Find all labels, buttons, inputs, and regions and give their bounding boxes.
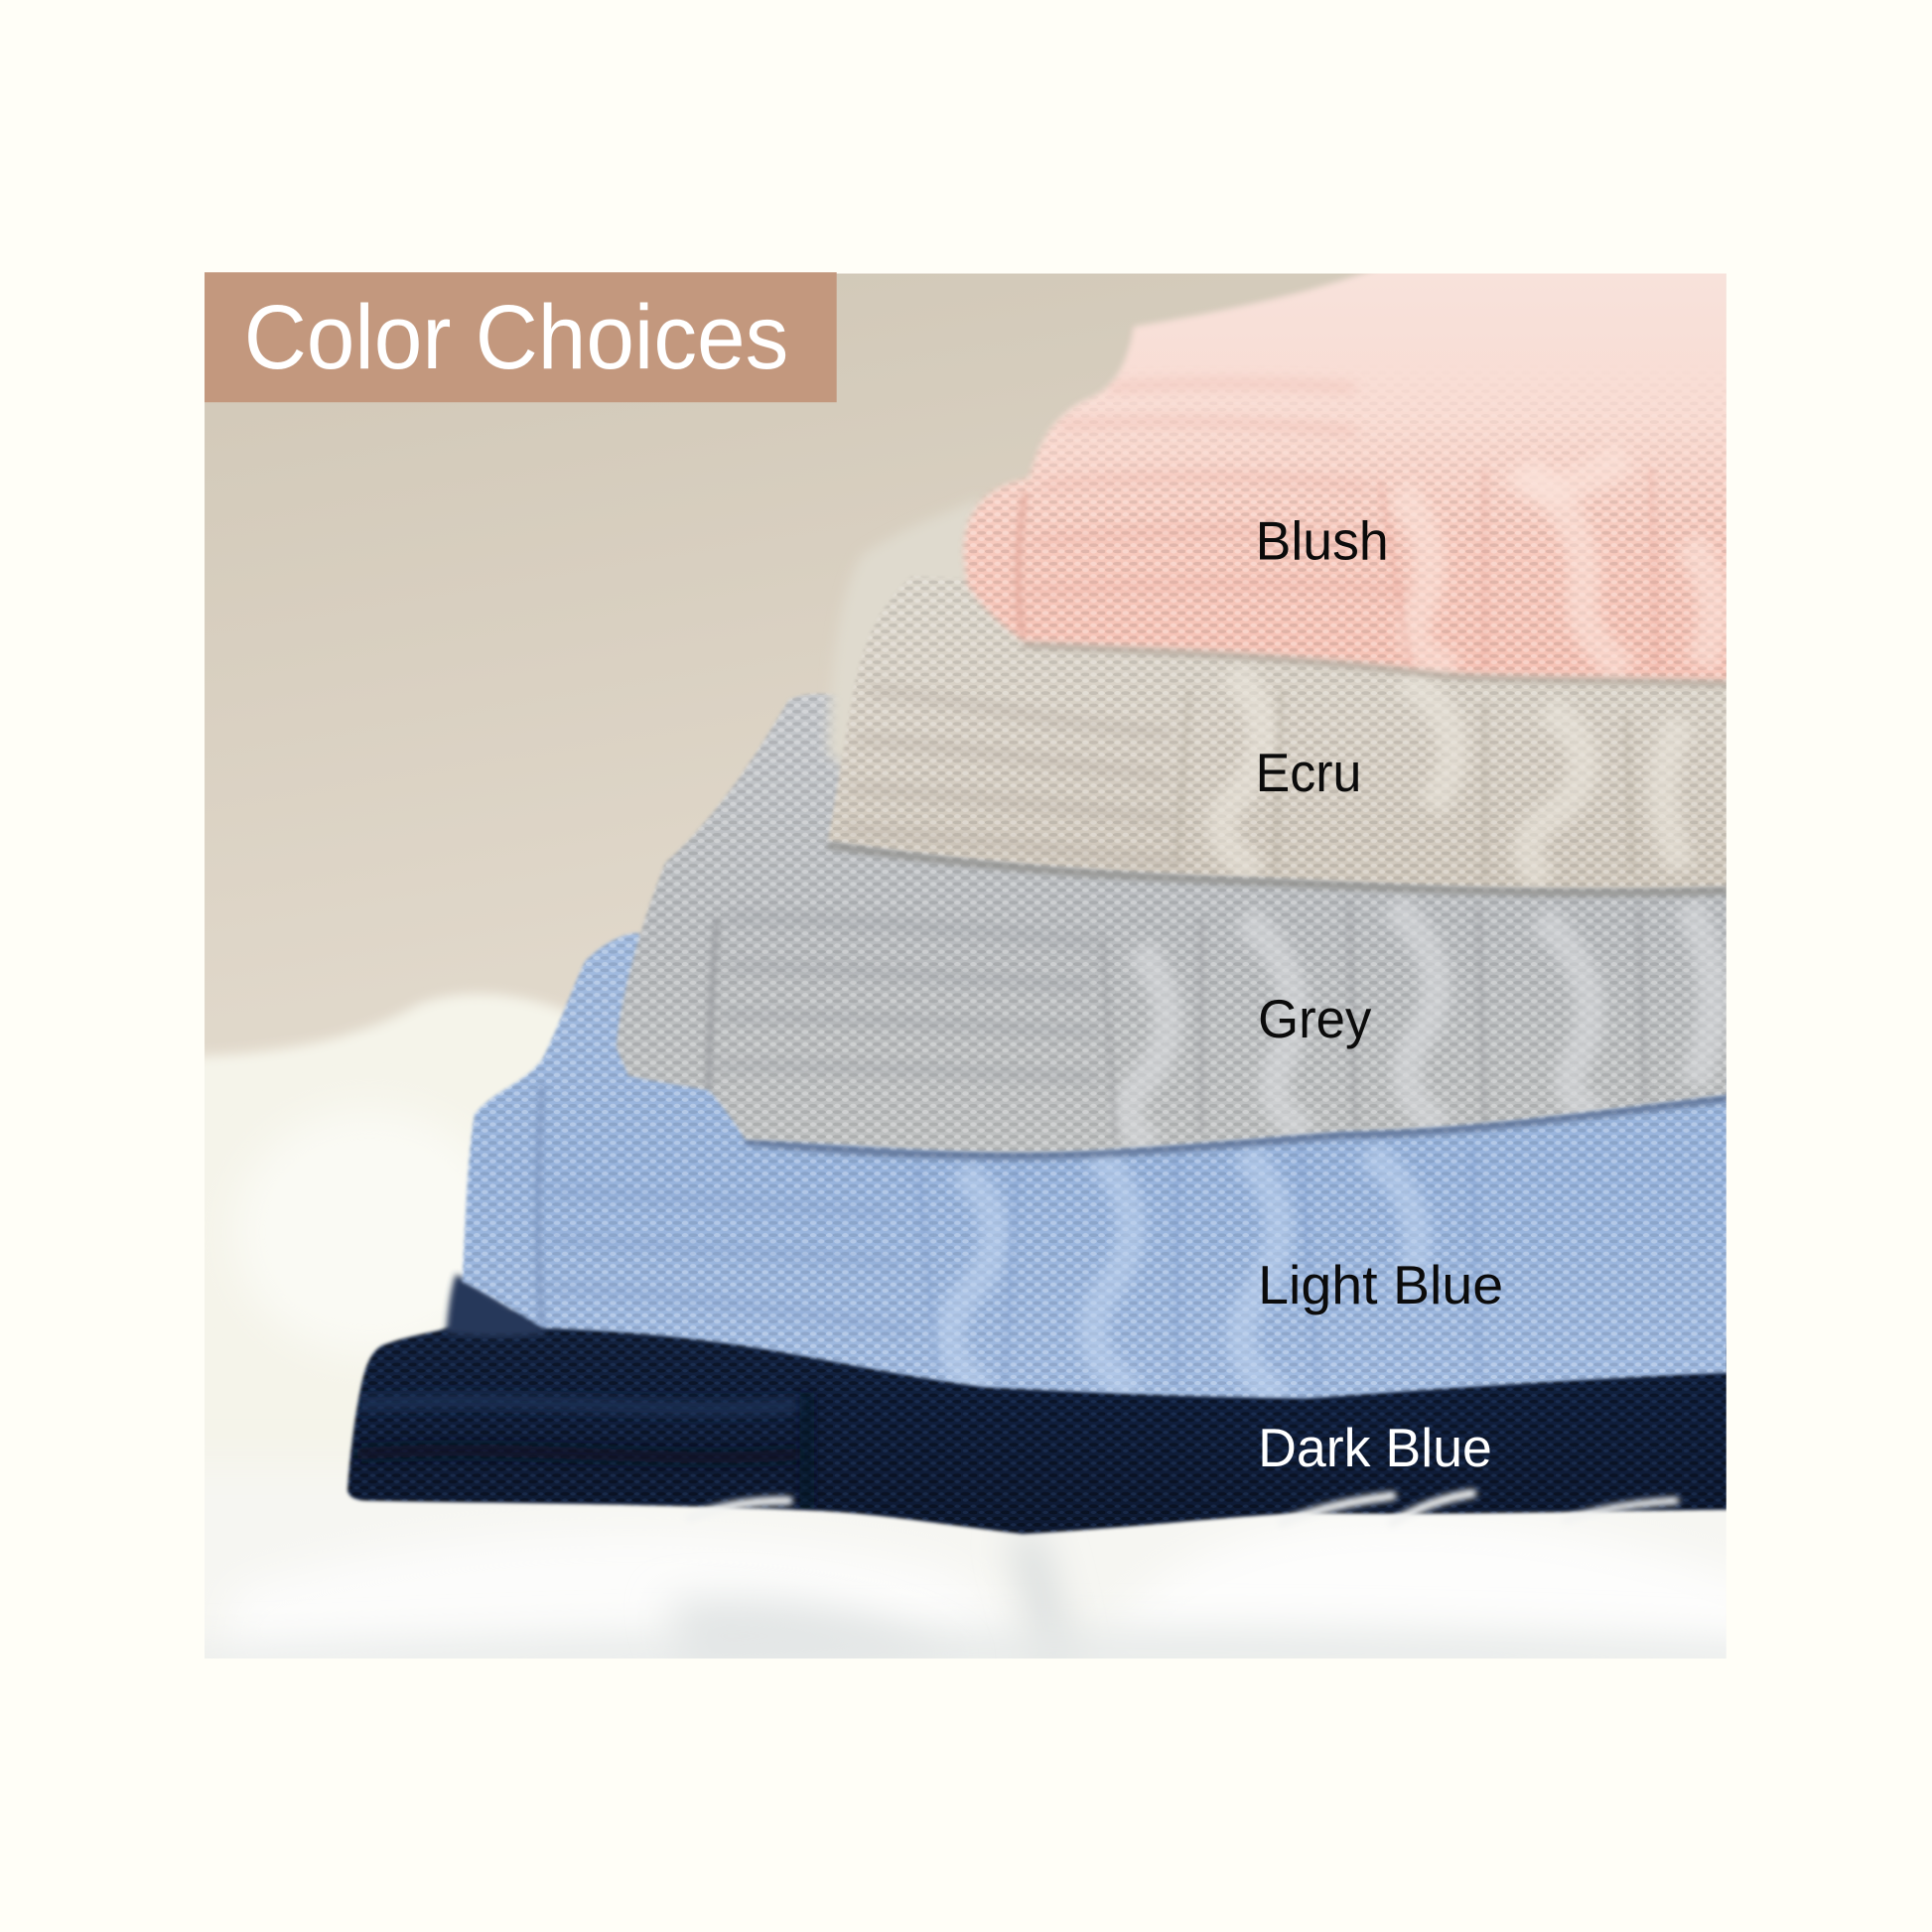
infographic canvas [205,272,1726,1658]
photo ground: white fur [148,994,1799,1737]
blanket fold: dark blue under layer [446,1274,548,1337]
blanket: light blue [456,924,1774,1405]
label: Grey: Grey [1258,989,1372,1049]
label: Ecru: Ecru [1256,743,1361,803]
photo backdrop: beige wall [205,274,1372,1061]
panel: photo of stacked blankets [205,272,1726,1658]
blanket: dark blue [345,1311,1726,1537]
label: Blush: Blush [1256,510,1389,571]
label: Dark Blue: Dark Blue [1258,1418,1492,1478]
blanket: ecru [828,576,1726,890]
blanket: grey [604,684,1774,1159]
heading banner: Color Choices: Color Choices [244,287,788,388]
label: Light Blue: Light Blue [1258,1255,1503,1315]
blanket fold: ecru back layer [823,503,975,768]
blanket: blush [961,274,1726,683]
fur edge overlapping dark blue hem [690,1493,1676,1523]
